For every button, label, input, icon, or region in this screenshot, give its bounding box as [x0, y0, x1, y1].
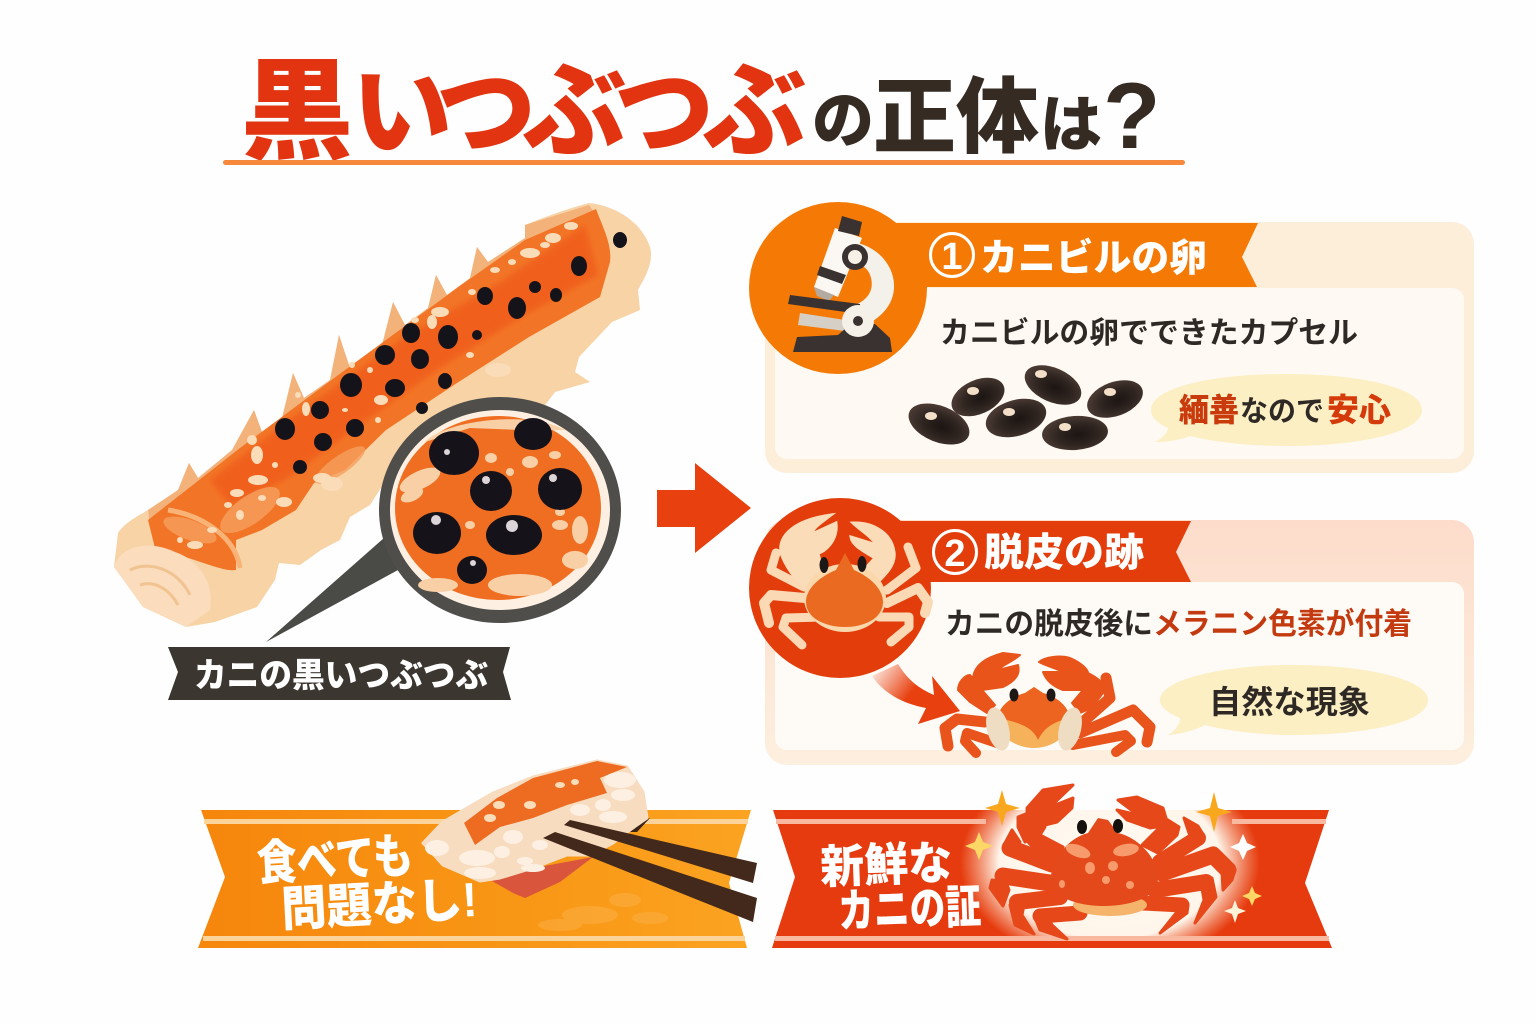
- speech bubble: なので: [1240, 396, 1324, 428]
- body text: カニの脱皮後に: [945, 608, 1153, 641]
- panel: explanation 1: [749, 202, 1474, 473]
- magnified black spots: [413, 418, 582, 584]
- title dark text: 正体: [873, 71, 1039, 164]
- title dark text: ?: [1103, 63, 1160, 168]
- banner text: カニの証: [837, 880, 982, 937]
- title dark text: は: [1040, 91, 1102, 160]
- banner: proof of freshness: [772, 784, 1332, 948]
- cut end meat: [114, 546, 211, 627]
- speech bubble: [1151, 374, 1422, 446]
- title red text: ぶ: [702, 54, 806, 170]
- panel: explanation 2: [749, 498, 1474, 765]
- leg lighter orange patches: [160, 440, 370, 549]
- title red text: 黒: [241, 51, 353, 174]
- heading number: [934, 530, 976, 575]
- banner stripes: [203, 819, 748, 941]
- banner text: [256, 827, 479, 938]
- illustration: crab: [990, 785, 1235, 939]
- panel inner: [775, 582, 1464, 750]
- banner text: 新鮮な: [819, 837, 953, 893]
- leg top edge and spikes: [148, 205, 596, 525]
- title red text: つ: [614, 57, 714, 169]
- banner: safe to eat: [198, 761, 757, 948]
- icon: crab: [945, 653, 1150, 753]
- panel background: [765, 520, 1474, 765]
- label ribbon: [168, 647, 511, 700]
- banner text: [819, 837, 982, 937]
- label text: カニの黒いつぶつぶ: [194, 657, 488, 695]
- leg orange shell surface: [148, 209, 610, 570]
- capsules: [903, 357, 1148, 453]
- magnifier ring: [379, 397, 621, 623]
- title dark text: [812, 63, 1160, 168]
- speech bubble: 緬善: [1179, 392, 1239, 428]
- speech bubble: [1160, 665, 1428, 735]
- title: [223, 51, 1185, 174]
- title red text: い: [352, 57, 452, 169]
- magnifier tail: [266, 538, 398, 642]
- magnifier inner edge: [390, 410, 610, 610]
- highlights: [431, 449, 557, 566]
- icon: shed crab shell: [749, 498, 931, 678]
- banner text: 食べても: [256, 830, 414, 891]
- pale patches: [396, 419, 588, 596]
- banner glow: [962, 810, 1258, 936]
- banner text: 問題なし!: [280, 874, 479, 937]
- heading text: 脱皮の跡: [984, 532, 1144, 575]
- icon: microscope: [749, 202, 927, 374]
- title red text: ぶ: [522, 54, 626, 170]
- heading number: [930, 234, 974, 278]
- banner stripes: [775, 819, 1329, 941]
- pale specks: [177, 222, 578, 549]
- title dark text: の: [812, 87, 874, 156]
- cut end band: [168, 510, 240, 568]
- black spots: [275, 232, 627, 474]
- leg shell: [114, 203, 651, 627]
- leg darker orange streak: [210, 225, 598, 505]
- title red text: つ: [436, 57, 536, 169]
- magnifier callout: [266, 397, 621, 642]
- title red text: [241, 51, 806, 174]
- heading text: カニビルの卵: [980, 237, 1207, 280]
- title underline: [223, 160, 1185, 165]
- panel inner: [775, 288, 1464, 459]
- speech bubble: 自然な現象: [1209, 684, 1370, 720]
- speech bubble: 安心: [1327, 392, 1391, 428]
- body text: カニビルの卵でできたカプセル: [940, 317, 1358, 350]
- arrow: to explanations: [657, 463, 751, 553]
- panel background: [765, 222, 1474, 473]
- heading number: 1: [941, 236, 963, 278]
- heading ribbon: [880, 521, 1191, 582]
- body text: メラニン色素が付着: [1153, 607, 1412, 641]
- illustration: crab meat sushi with chopsticks: [423, 761, 757, 922]
- banner mottling: [538, 893, 668, 931]
- banner shape: [772, 810, 1332, 948]
- heading ribbon: [880, 223, 1258, 287]
- label: black spots: [168, 647, 511, 700]
- magnified shell: [395, 416, 601, 600]
- sparkles: [965, 790, 1262, 923]
- arrow: shell to crab: [872, 664, 960, 724]
- heading number: 2: [944, 533, 966, 575]
- banner shape: [198, 810, 751, 948]
- illustration: crab leg: [114, 203, 651, 627]
